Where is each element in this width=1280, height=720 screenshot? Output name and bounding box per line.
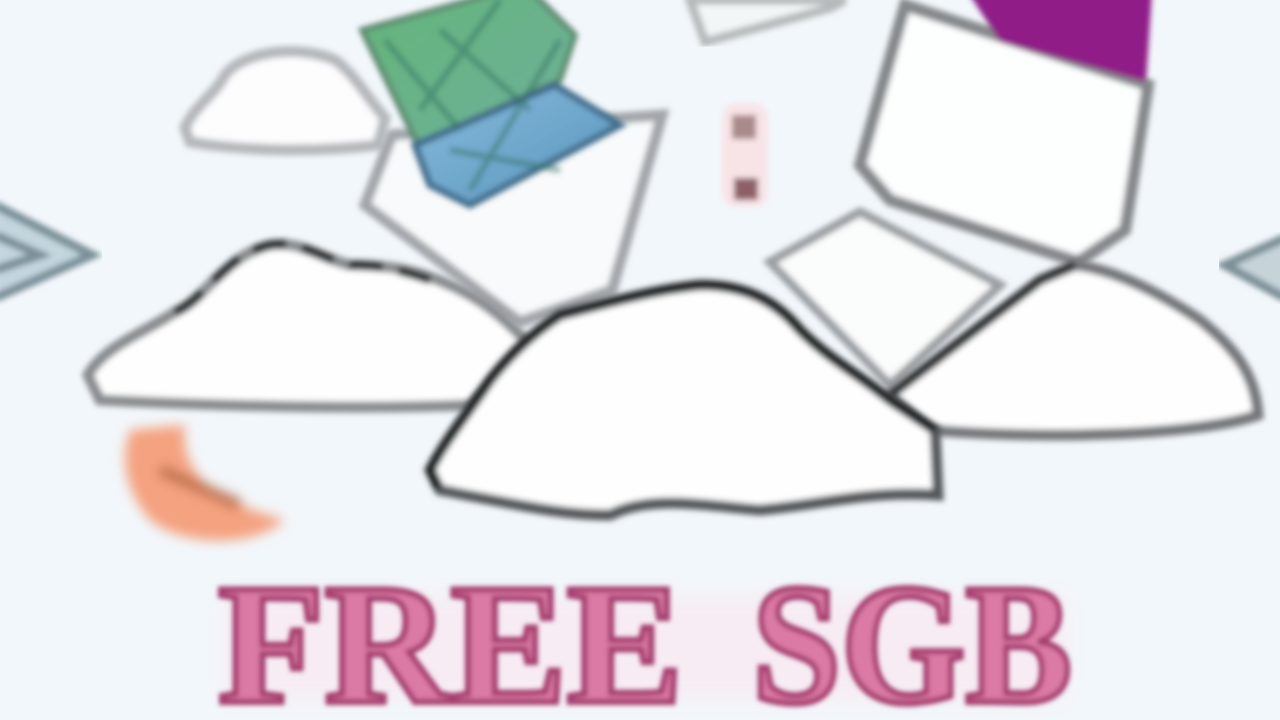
icon: orange moon (125, 425, 285, 541)
title halo (225, 595, 1065, 700)
icon: green and blue cube (362, 0, 620, 205)
icon: left cloud (88, 244, 530, 407)
icon: pink dots exclamation (722, 103, 768, 207)
icon: small cloud top left (185, 52, 385, 150)
icon: center cloud (430, 285, 938, 515)
icon: back document box (365, 115, 662, 322)
icon: diamond behind clouds (770, 212, 1000, 385)
icon: right arrow (1225, 238, 1280, 298)
icon: right cloud (890, 265, 1258, 435)
icon: top small box (690, 0, 845, 42)
title (218, 550, 1072, 720)
icon: left arrow (0, 205, 92, 298)
icon: large document with purple corner (860, 0, 1152, 262)
